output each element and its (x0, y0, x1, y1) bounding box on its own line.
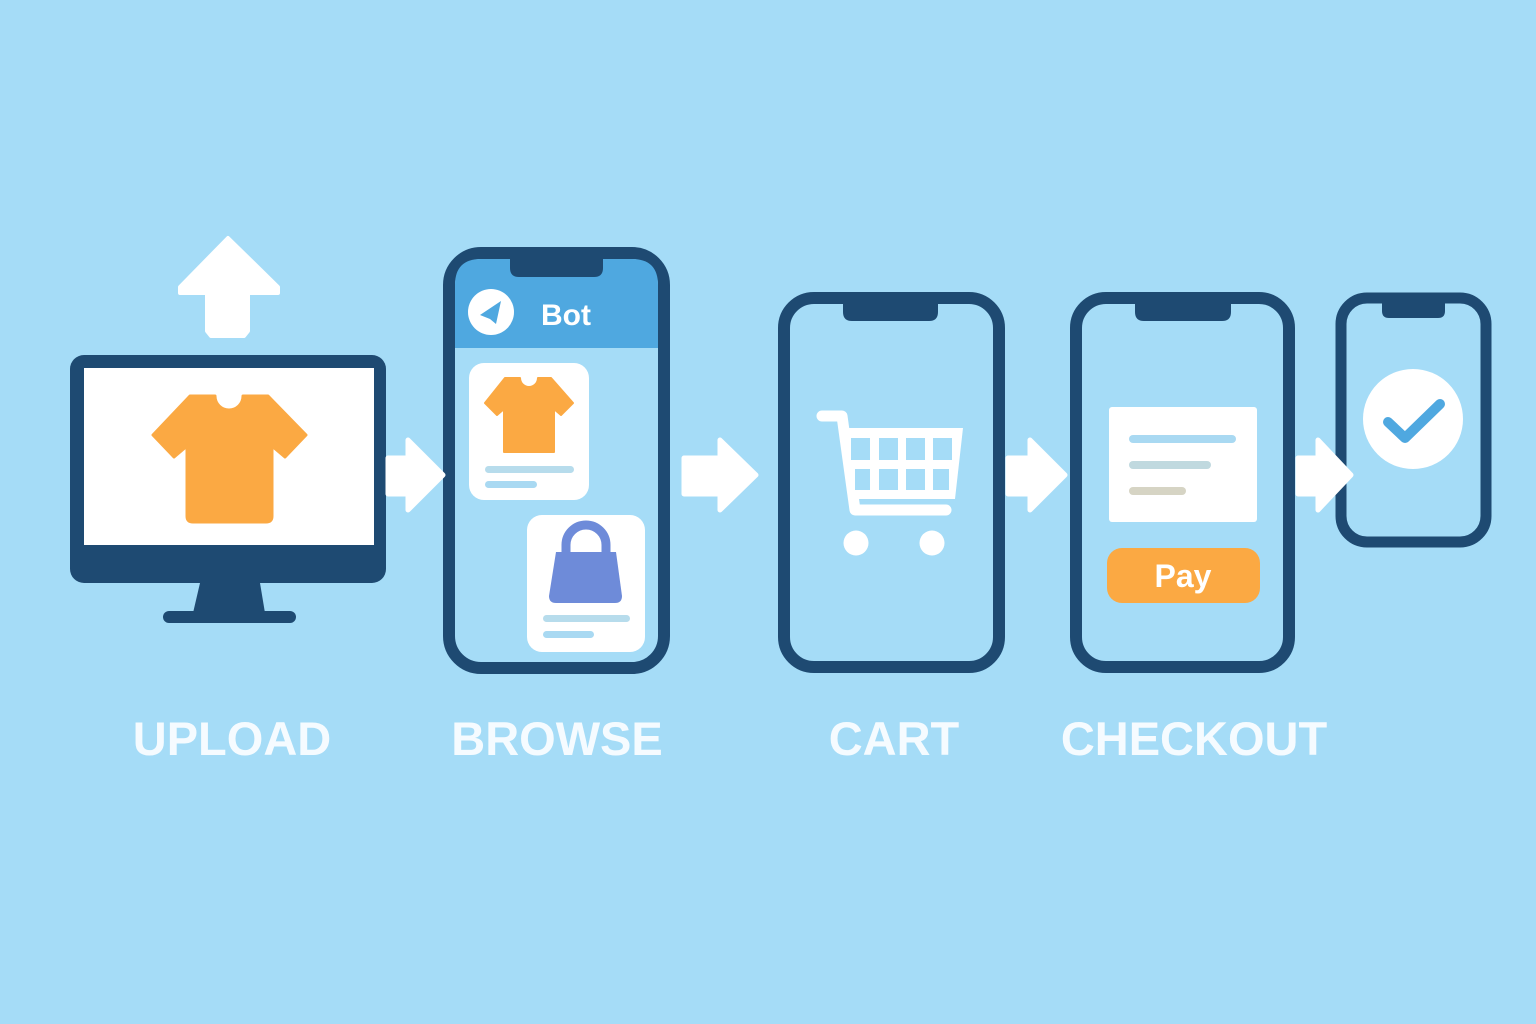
icon: check (1363, 369, 1463, 469)
pay button (1107, 548, 1260, 603)
pay button: Pay (1155, 558, 1212, 594)
labels: UPLOAD (133, 712, 331, 765)
labels: CHECKOUT (1061, 712, 1327, 765)
labels: CART (829, 712, 960, 765)
form card (1109, 407, 1257, 522)
bot header (468, 289, 591, 335)
monitor with t-shirt (70, 355, 386, 623)
labels (133, 712, 1327, 765)
card: bag (527, 515, 645, 652)
phone: checkout (1076, 298, 1289, 667)
phone: cart (784, 298, 999, 667)
bot header: Bot (541, 299, 591, 332)
card: t-shirt (469, 363, 589, 500)
arrow 2 (684, 440, 756, 510)
labels: BROWSE (451, 712, 663, 765)
icon: upload arrow (180, 238, 278, 336)
phone: browse (449, 253, 664, 668)
arrow 3 (1008, 440, 1065, 510)
phone: confirmation (1341, 298, 1486, 542)
icon: shopping cart (822, 416, 963, 556)
arrow 4 (1298, 440, 1351, 510)
notch (510, 257, 603, 277)
icon: t-shirt (153, 396, 306, 522)
arrow 1 (388, 440, 443, 510)
